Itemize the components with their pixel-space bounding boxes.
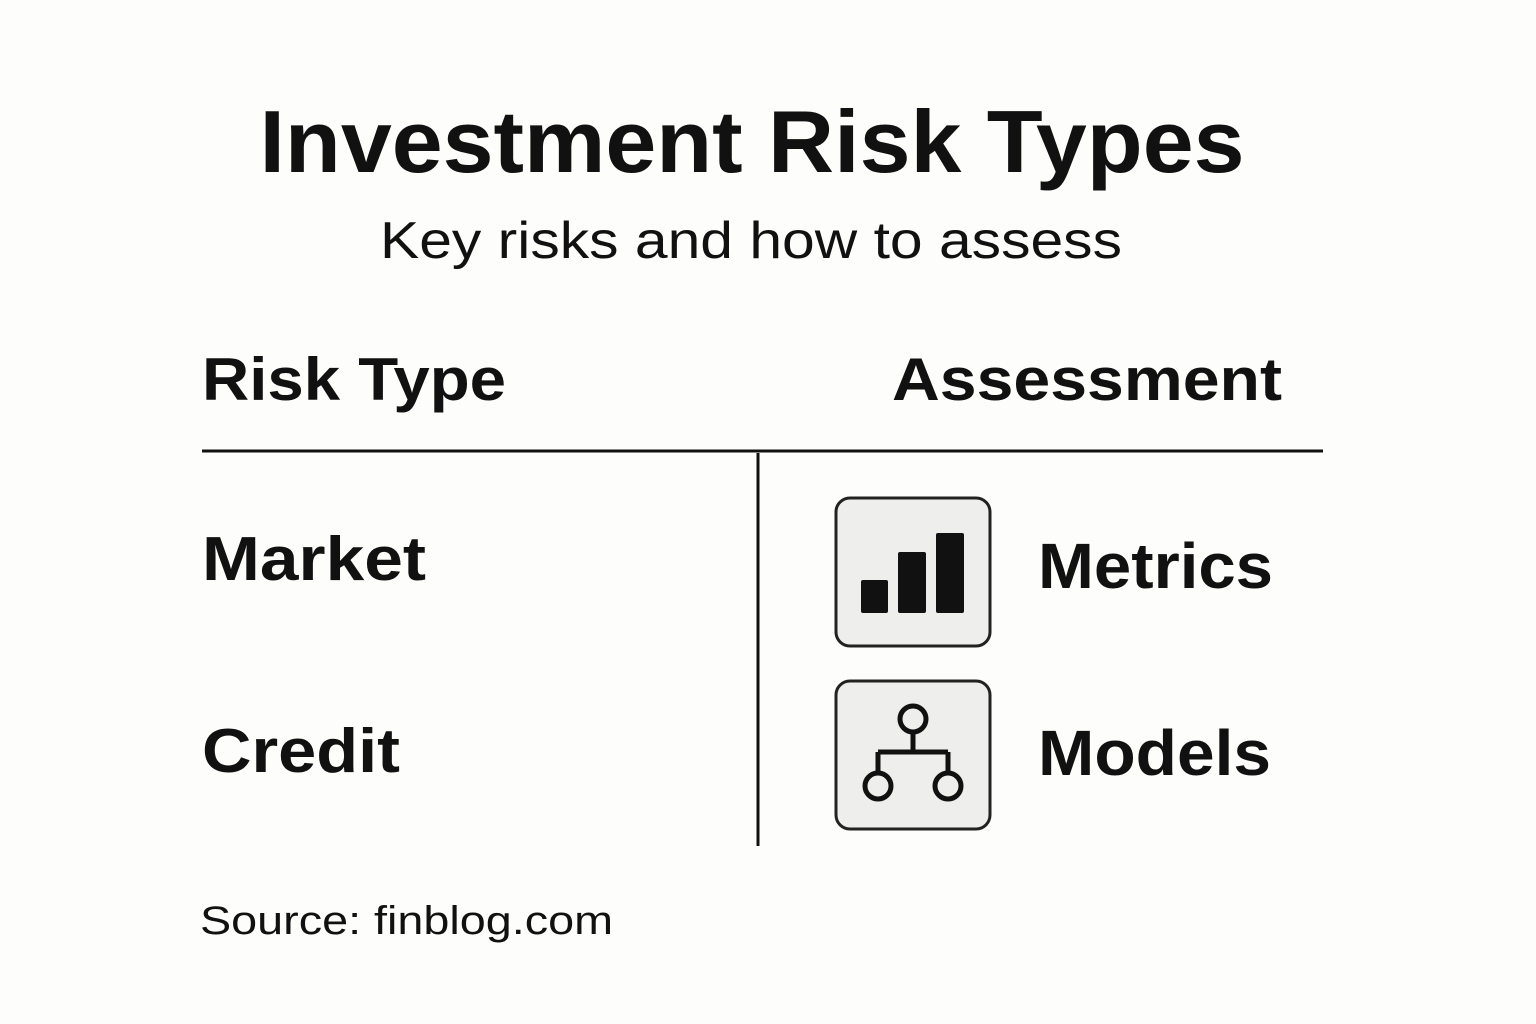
icon: models network <box>836 681 990 829</box>
label: metrics: Metrics <box>1038 530 1273 602</box>
column header: risk type: Risk Type <box>202 346 506 413</box>
subtitle: Key risks and how to assess <box>380 212 1122 270</box>
title: Investment Risk Types <box>260 92 1244 191</box>
column header: assessment: Assessment <box>892 346 1282 413</box>
label: models: Models <box>1038 717 1271 789</box>
row label: credit: Credit <box>202 717 400 786</box>
row label: market: Market <box>202 525 426 594</box>
source: Source: finblog.com <box>200 899 613 943</box>
icon: metrics bar chart <box>836 498 990 646</box>
